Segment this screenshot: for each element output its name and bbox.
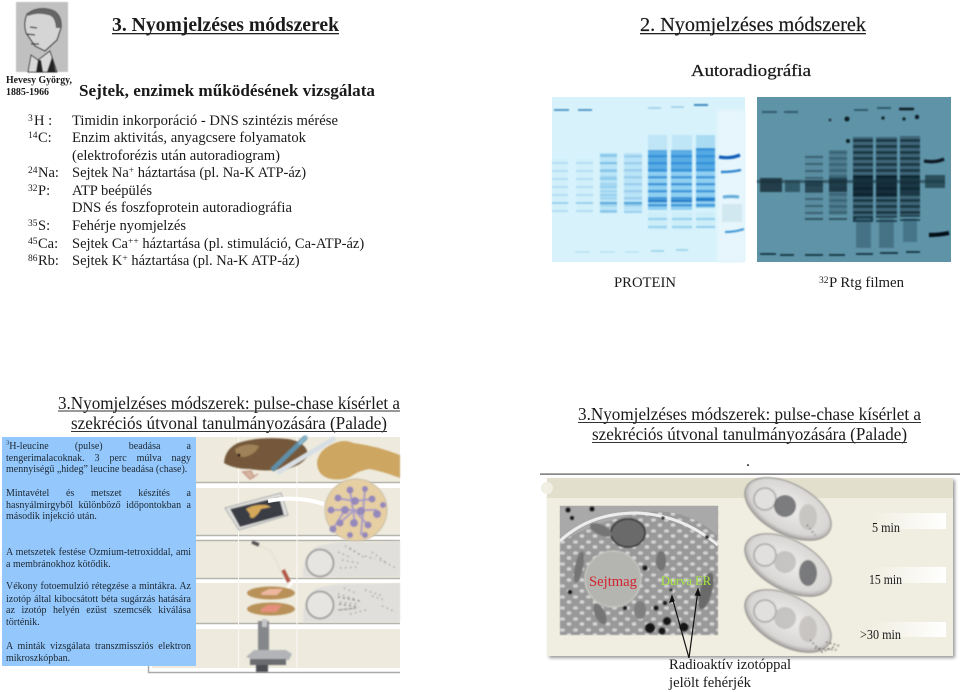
panel: experiment steps illustration: [148, 436, 400, 674]
text block: isotope list: 24: [28, 166, 38, 176]
heading: pulse-chase, right: [578, 404, 921, 470]
arrow: tissue to section: [268, 499, 324, 504]
text block: isotope list: Enzim aktivitás, anyagcsere folyamatok: [72, 130, 307, 146]
panel: experiment steps text: [2, 437, 196, 666]
label: Sejtmag: Sejtmag: [589, 574, 637, 590]
text block: isotope list: Timidin inkorporáció - DNS szintézis mérése: [72, 113, 338, 129]
text block: isotope list: (elektroforézis után autoradiogram): [72, 148, 280, 164]
caption: radioactive labelled proteins: jelölt fehérjék: [668, 675, 752, 691]
cell at 15 min: [735, 521, 841, 609]
micrograph: cell with radioactive label: [560, 506, 718, 635]
step: sampling: hasnyálmirgyből különböző időpontokban a: [6, 500, 191, 511]
step: photoemulsion: izotóp által kibocsátott béta sugárzás hatására: [6, 594, 191, 605]
text block: isotope list: 3: [28, 114, 33, 124]
step: injection: 3H-leucine (pulse) beadása a: [6, 440, 191, 452]
label: 32P Rtg filmen: P Rtg filmen: [829, 275, 905, 291]
text block: isotope list: 35: [28, 219, 38, 229]
text block: isotope list: P:: [38, 183, 50, 199]
text block: isotope list: 32: [28, 184, 38, 194]
subheading: Autoradiográfia: Autoradiográfia: [691, 61, 812, 80]
label: Durva ER: Durva ER: [661, 573, 711, 588]
step: sampling: [6, 488, 191, 522]
caption: Hevesy György: Hevesy György,: [6, 75, 72, 86]
arrows: labelled proteins: [670, 589, 700, 658]
title: panel 3: 3. Nyomjelzéses módszerek: [112, 14, 340, 36]
step: staining: A metszetek festése Ozmium-tetroxiddal, ami: [6, 547, 191, 558]
text block: isotope list: ATP beépülés: [72, 183, 152, 199]
step: photoemulsion: Vékony fotoemulzió rétegzése a mintákra. Az: [6, 581, 191, 592]
illustration: syringes: [272, 436, 335, 473]
text block: isotope list: Na:: [38, 165, 59, 181]
text block: isotope list: 45: [28, 237, 38, 247]
label strip: 15 min: [869, 567, 946, 587]
image: protein gel: [552, 97, 745, 262]
text block: isotope list: 86: [28, 254, 38, 264]
text block: isotope list: Sejtek Na: [72, 165, 129, 181]
heading: pulse-chase, right: szekréciós útvonal tanulmányozására (Palade): [592, 424, 907, 445]
illustration: labelled slides: [247, 586, 295, 616]
heading: pulse-chase, left: szekréciós útvonal tanulmányozására (Palade): [71, 413, 387, 434]
caption: Hevesy György: 1885-1966: [6, 87, 49, 98]
text block: isotope list: Fehérje nyomjelzés: [72, 218, 186, 234]
step: staining: [6, 547, 191, 570]
illustration: electron microscope: [246, 619, 292, 672]
step: electron microscopy: [6, 641, 191, 664]
text block: isotope list: háztartása (pl. Na-K ATP-áz): [128, 253, 300, 269]
panel: time course illustration: [540, 465, 960, 665]
cell at 5 min: [735, 465, 841, 553]
label: 32P Rtg filmen: 32: [819, 276, 829, 286]
text block: isotope list: Sejtek K: [72, 253, 122, 269]
caption: Hevesy György: [6, 75, 72, 98]
heading: pulse-chase, left: [58, 393, 400, 434]
step: sampling: Mintavétel és metszet készítés a: [6, 488, 191, 499]
step: injection: [6, 440, 191, 475]
title: panel 2: 2. Nyomjelzéses módszerek: [640, 14, 866, 36]
step: photoemulsion: [6, 581, 191, 628]
step: electron microscopy: mikroszkópban.: [6, 653, 70, 664]
heading: pulse-chase, left: 3.Nyomjelzéses módszerek: pulse-chase kísérlet a: [58, 393, 400, 413]
text block: isotope list: Sejtek Ca: [72, 236, 128, 252]
step: injection: tengerimalacoknak. 3 perc múlva nagy: [6, 453, 191, 464]
text block: isotope list: háztartása (pl. Na-K ATP-áz): [134, 165, 306, 181]
text block: isotope list: 14: [28, 131, 38, 141]
heading: pulse-chase, right: .: [746, 453, 750, 470]
text block: isotope list: Rb:: [38, 253, 59, 269]
label strip: 5 min: [870, 513, 946, 535]
step: photoemulsion: az izotóp helyén ezüst szemcsék kiválása: [6, 605, 191, 616]
text block: isotope list: +: [129, 166, 134, 176]
illustration: tissue tray: [225, 493, 288, 530]
portrait: Hevesy György: [16, 2, 68, 72]
heading: pulse-chase, right: 3.Nyomjelzéses módszerek: pulse-chase kísérlet a: [578, 404, 921, 424]
illustration: guinea pig: [224, 438, 308, 479]
image: 32P film: [757, 97, 951, 262]
caption: radioactive labelled proteins: [668, 657, 791, 691]
subheading: cell and enzyme function: Sejtek, enzimek működésének vizsgálata: [79, 81, 375, 100]
text block: isotope list: DNS és foszfoprotein autoradiográfia: [72, 200, 293, 216]
step: electron microscopy: A minták vizsgálata transzmissziós elektron: [6, 641, 191, 652]
illustration: tissue section: [325, 479, 387, 541]
label strip: 15 min: 15 min: [869, 572, 902, 587]
illustration: pancreas: [317, 441, 400, 480]
text block: isotope list: [28, 113, 364, 269]
cell at 30 min: [735, 577, 841, 665]
text block: isotope list: +: [122, 254, 128, 264]
step: sampling: második injekció után.: [6, 511, 97, 522]
label strip: >30 min: >30 min: [860, 627, 901, 642]
illustration: cell sections: [303, 541, 400, 622]
step: injection: mennyiségű „hideg” leucine beadása (chase).: [6, 464, 187, 475]
text block: isotope list: Ca:: [38, 236, 58, 252]
text block: isotope list: S:: [38, 218, 50, 234]
label: PROTEIN: PROTEIN: [614, 275, 677, 291]
text block: isotope list: H :: [34, 113, 52, 129]
step: staining: a membránokhoz kötődik.: [6, 559, 111, 570]
illustration: staining pipette: [252, 542, 292, 590]
label strip: >30 min: [860, 622, 946, 642]
label strip: 5 min: 5 min: [872, 520, 900, 535]
step: photoemulsion: történik.: [6, 617, 40, 628]
text block: isotope list: ++: [128, 237, 139, 247]
caption: radioactive labelled proteins: Radioaktív izotóppal: [669, 657, 791, 673]
text block: isotope list: háztartása (pl. stimuláció, Ca-ATP-áz): [139, 236, 364, 252]
text block: isotope list: C:: [38, 130, 52, 146]
